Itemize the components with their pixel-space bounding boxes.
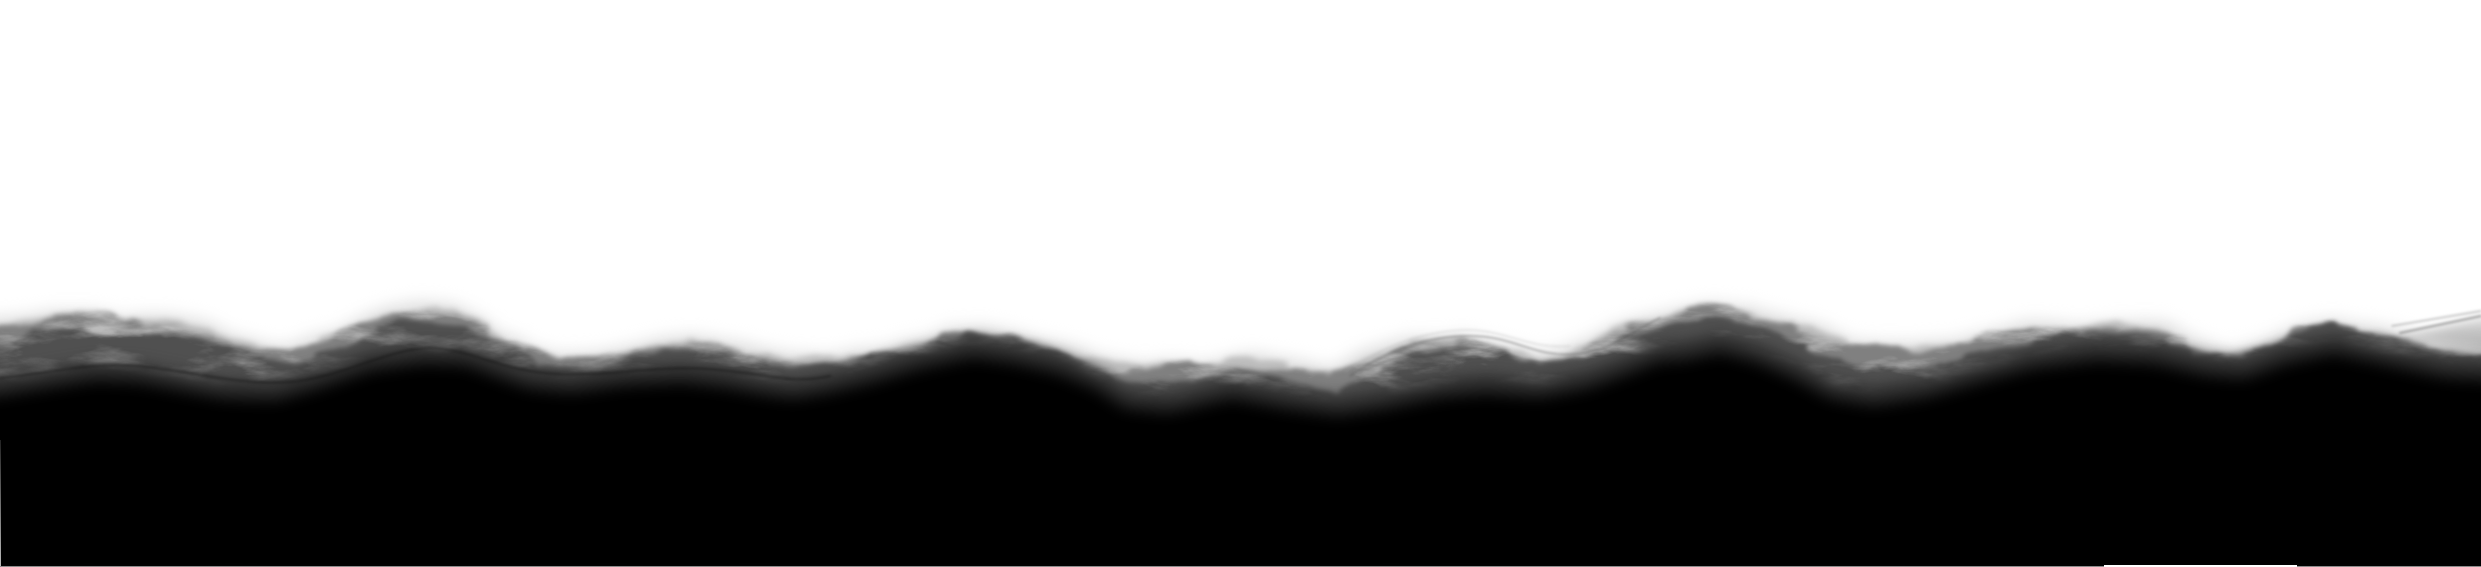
- contour streaks in ink: [0, 318, 1660, 383]
- right edge thin streaks: [2392, 311, 2481, 333]
- pale outer glow: [0, 301, 2481, 567]
- solid black ink mass: [0, 351, 2481, 567]
- left edge sliver: [0, 440, 1, 567]
- right corner grey wedge: [2400, 318, 2481, 375]
- mid grey wash layer: [0, 314, 2481, 567]
- bottom edge line: [0, 565, 2481, 567]
- pale outer haze layer: [0, 306, 2481, 567]
- textured grey wash layer: [0, 308, 2481, 567]
- dark transition band: [0, 333, 2481, 563]
